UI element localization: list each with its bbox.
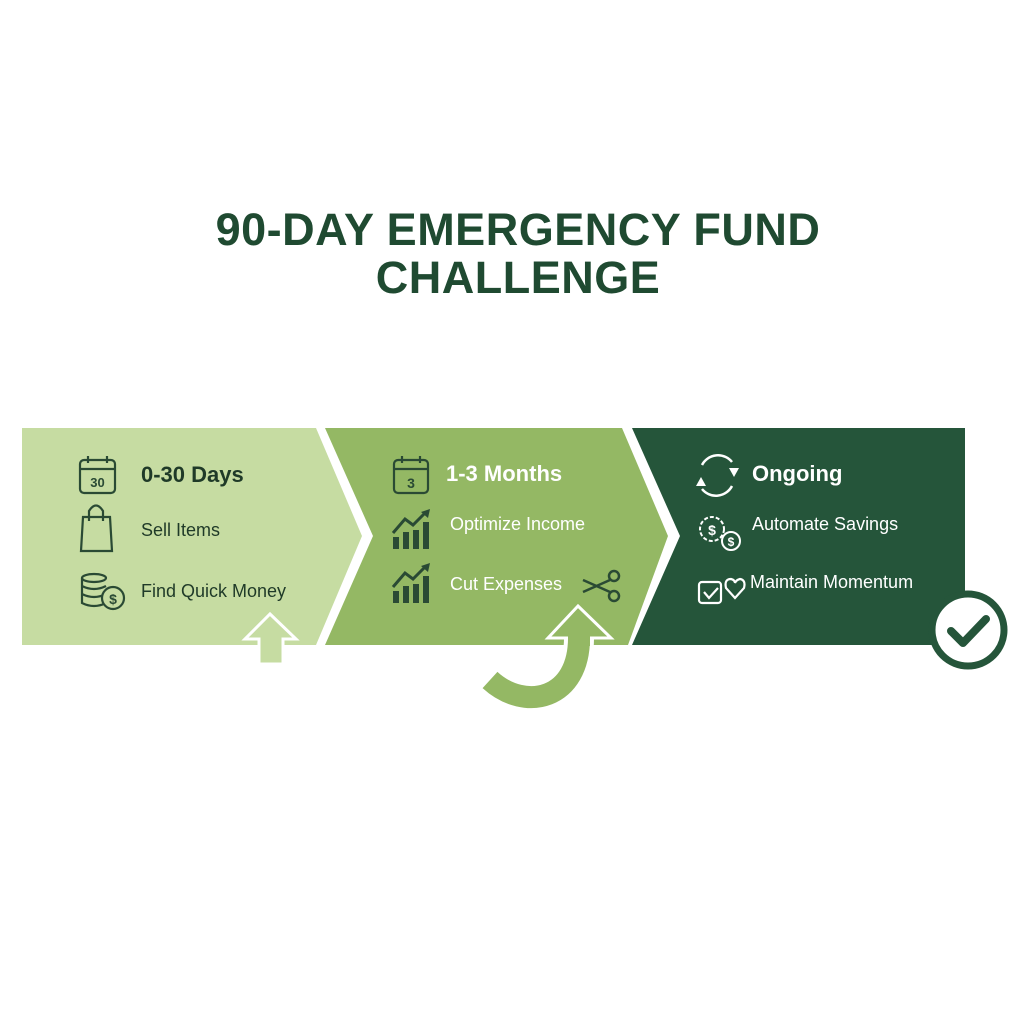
panel: ongoing: $	[708, 522, 716, 538]
title	[216, 204, 820, 303]
title: CHALLENGE	[376, 252, 660, 303]
arrow: curved up	[490, 606, 611, 697]
icon: coins	[82, 574, 124, 609]
panel: 1-3 months	[325, 428, 668, 645]
title: 90-DAY EMERGENCY FUND	[216, 204, 820, 255]
icon: check circle	[932, 594, 1004, 666]
panel: ongoing	[632, 428, 965, 645]
panel: ongoing: $	[728, 535, 735, 549]
text: optimize income: Optimize Income	[450, 514, 585, 534]
heading: 1-3 months: 1-3 Months	[446, 461, 562, 486]
text: maintain momentum: Maintain Momentum	[750, 572, 913, 592]
icon: calendar 3	[394, 456, 428, 493]
panel: 0-30 days: $	[109, 591, 117, 607]
panel: 0-30 days	[22, 428, 362, 645]
icon: gear dollars	[700, 517, 740, 550]
icon: chart 2	[393, 563, 430, 603]
icon: calendar 30	[80, 456, 115, 493]
heading: 0-30 days: 0-30 Days	[141, 462, 244, 487]
text: find quick money: Find Quick Money	[141, 581, 286, 601]
icon: check heart	[699, 579, 744, 603]
icon: scissors	[583, 571, 619, 601]
text: cut expenses: Cut Expenses	[450, 574, 562, 594]
heading: ongoing: Ongoing	[752, 461, 842, 486]
panel: 0-30 days: 30	[90, 475, 105, 490]
icon: bag	[81, 506, 112, 551]
icon: refresh	[696, 455, 739, 496]
icon: chart 1	[393, 509, 430, 549]
arrow: small up	[245, 614, 296, 664]
panel: 1-3 months: 3	[407, 475, 415, 491]
text: automate savings: Automate Savings	[752, 514, 898, 534]
text: sell items: Sell Items	[141, 520, 220, 540]
